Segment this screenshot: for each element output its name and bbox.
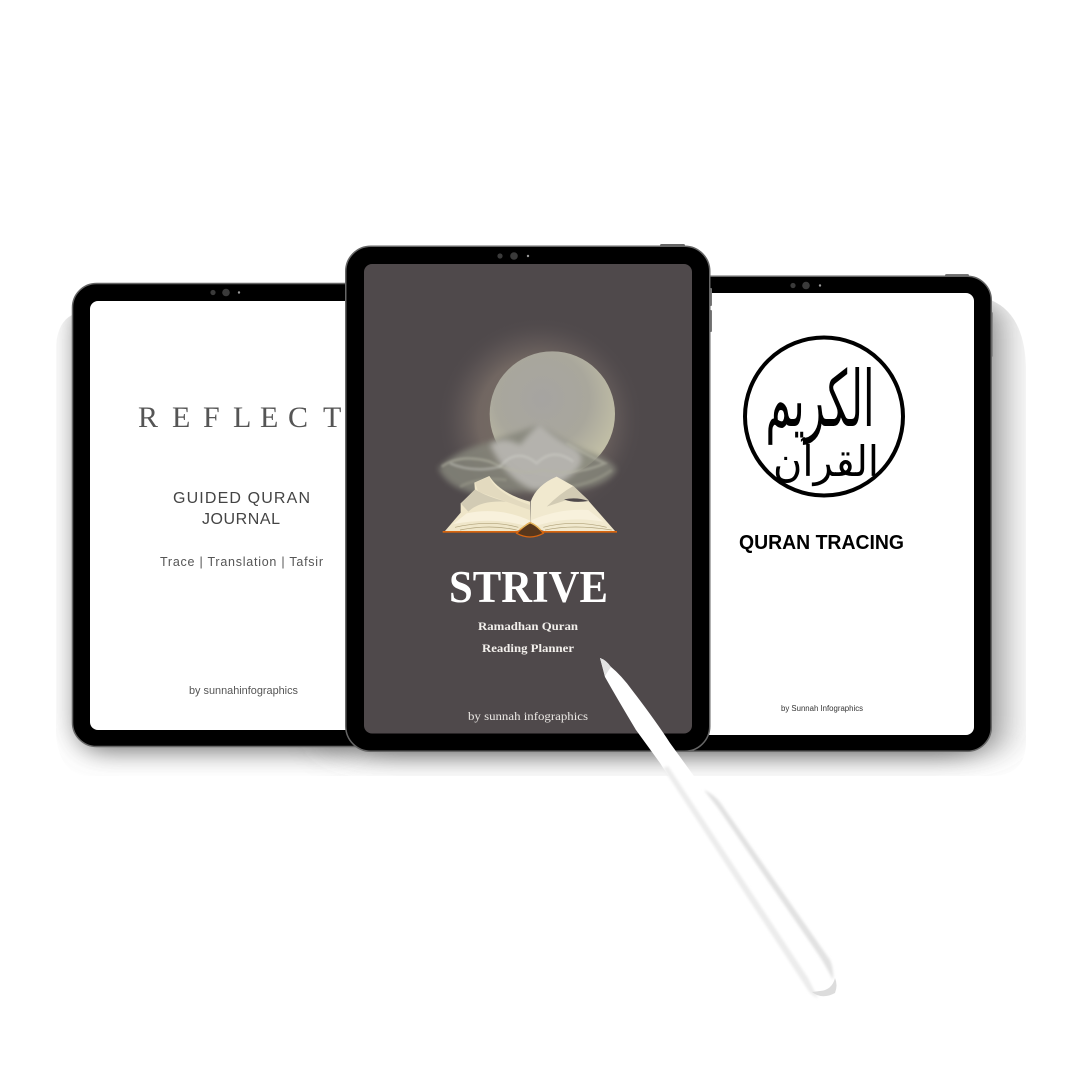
- right grey page: [547, 486, 589, 507]
- illustration: moon, smoke and open book: [437, 317, 643, 537]
- drop shadow behind tablets: [57, 300, 1026, 776]
- pencil tip: [600, 658, 611, 676]
- pencil left shading: [663, 766, 818, 998]
- credit: by sunnahinfographics: by sunnahinfographics: [189, 685, 298, 697]
- calligraphy emblem: [745, 338, 903, 496]
- heading: Quran Tracing: QURAN TRACING: [739, 531, 904, 554]
- side buttons: [990, 312, 993, 357]
- pencil right shading: [704, 790, 833, 980]
- calligraphy: lower word: القرآن: [773, 436, 879, 486]
- dark slit: [564, 498, 589, 502]
- pencil body: [600, 658, 837, 998]
- tablet body: [661, 276, 991, 751]
- screen: [364, 264, 692, 734]
- orange base line: [443, 531, 617, 533]
- tablet body: [346, 246, 710, 751]
- tablet: Reflect journal: [72, 284, 382, 746]
- left page highlight: [453, 511, 530, 527]
- top button: [945, 274, 969, 278]
- top button: [660, 244, 685, 248]
- side button lower: [709, 310, 712, 332]
- stylus pencil: [600, 658, 837, 998]
- moon: [490, 351, 615, 477]
- heading: Strive: STRIVE: [449, 562, 608, 612]
- credit: by sunnah infographics: by sunnah infographics: [468, 709, 588, 723]
- tablet: Strive planner: [346, 244, 712, 751]
- screen: [90, 301, 380, 730]
- camera dots: [790, 282, 821, 289]
- subtitle: Guided Quran Journal: GUIDED QURAN: [173, 490, 310, 507]
- left page raised edge: [475, 477, 530, 510]
- page edge lines: [455, 523, 612, 530]
- side button upper: [709, 288, 712, 306]
- pencil end cap: [812, 978, 836, 996]
- left grey page: [461, 489, 507, 512]
- right page base: [531, 477, 615, 531]
- left page base: [445, 476, 531, 531]
- heading: Reflect: REFLECT: [138, 401, 341, 434]
- spine gold edge: [520, 523, 541, 530]
- camera dots: [210, 289, 240, 296]
- text: Trace Translation Tafsir: Trace | Translation | Tafsir: [160, 555, 323, 569]
- subtitle: Guided Quran Journal: JOURNAL: [202, 511, 280, 528]
- moon glow: [437, 317, 643, 523]
- tablet body: [72, 284, 382, 746]
- smoke: [438, 423, 617, 493]
- open book: [443, 476, 617, 537]
- right page highlight: [532, 510, 603, 527]
- subtitle: Ramadhan Quran Reading Planner: Ramadhan Quran: [478, 619, 578, 633]
- emblem ring: [745, 338, 903, 496]
- credit: by Sunnah Infographics: by Sunnah Infographics: [781, 704, 863, 713]
- subtitle: Guided Quran Journal: [173, 490, 310, 528]
- subtitle: Ramadhan Quran Reading Planner: Reading Planner: [482, 641, 575, 655]
- spine: [517, 523, 543, 537]
- tablet: Quran Tracing: [660, 274, 993, 751]
- calligraphy: upper word: الكريم: [766, 354, 874, 445]
- camera dots: [497, 252, 529, 260]
- subtitle: Ramadhan Quran Reading Planner: [478, 619, 578, 655]
- screen: [660, 293, 974, 735]
